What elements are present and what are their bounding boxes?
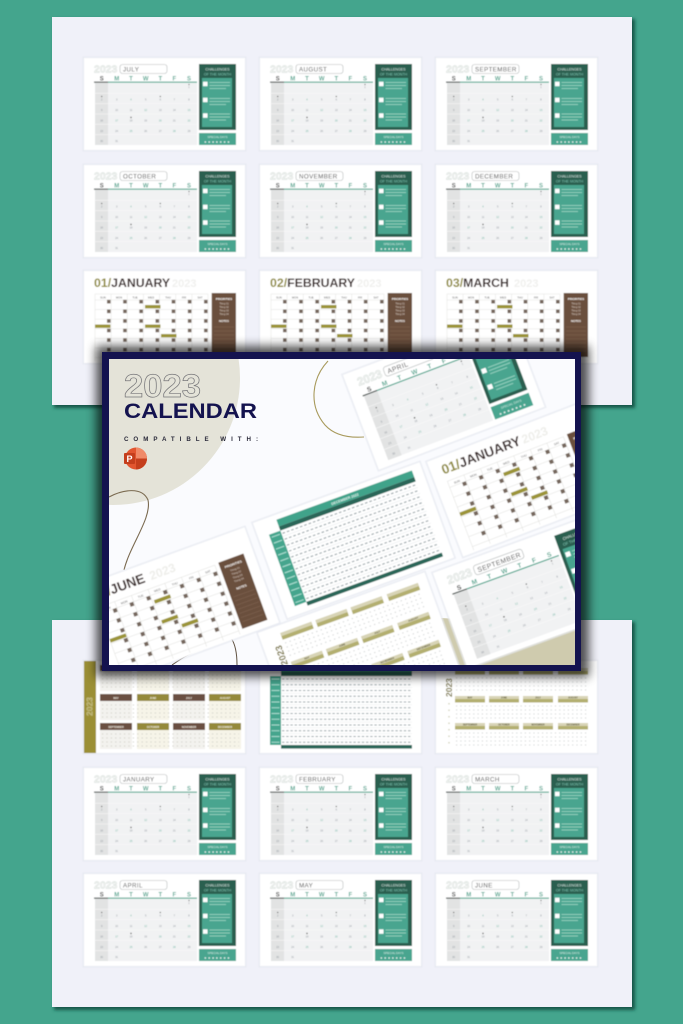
slide: October — [82, 164, 246, 258]
title: CALENDAR: CALENDAR — [124, 399, 258, 423]
rotated slide: April — [342, 359, 546, 472]
slide: year table — [258, 660, 422, 754]
slide: September — [434, 56, 598, 152]
slide: October: OCTOBER — [123, 174, 156, 180]
slide: April — [82, 872, 246, 968]
rotated slide: 01 January priorities: 01/JANUARY — [439, 433, 523, 477]
rotated slide: September — [432, 520, 575, 665]
rotated slide: 01 January priorities: 2023 — [520, 424, 550, 447]
slide: year overview brown and olive — [82, 660, 246, 754]
slide: January — [82, 766, 246, 862]
hero shadow — [96, 346, 589, 677]
slide: August — [258, 56, 422, 152]
slide: January: JANUARY — [123, 776, 155, 784]
rotated slide: 06 June priorities: 2023 — [147, 560, 178, 583]
slide: May: MAY — [299, 882, 313, 890]
slide: February: FEBRUARY — [299, 776, 336, 784]
slide: June: JUNE — [475, 882, 493, 890]
slide: year overview khaki — [434, 660, 598, 754]
slide: December — [434, 164, 598, 258]
panel: top sheet — [52, 17, 635, 408]
slide: September: SEPTEMBER — [475, 66, 517, 74]
slide: 02 February priorities: 2023 — [357, 278, 381, 290]
subtitle: compatible with: COMPATIBLE WITH: — [124, 436, 258, 443]
gold curve top — [314, 361, 364, 437]
rotated slide: 06 June priorities: 06/JUNE — [90, 571, 147, 604]
slide: 01 January priorities: 01/JANUARY — [94, 276, 170, 290]
hero frame — [102, 352, 581, 671]
slide: 03 March priorities — [434, 270, 598, 364]
rotated slide: April: APRIL — [387, 361, 410, 376]
slide: 01 January priorities: 2023 — [172, 278, 196, 290]
top slide grid — [82, 56, 598, 364]
slide: March — [434, 766, 598, 862]
slide: 03 March priorities: 2023 — [514, 278, 538, 290]
hero slide — [109, 359, 575, 665]
title: 2023 outline: 2023 — [124, 368, 201, 404]
slide: November — [258, 164, 422, 258]
bottom slide grid — [82, 660, 598, 968]
slide: April: APRIL — [123, 882, 143, 890]
slide: 01 January priorities — [82, 270, 246, 364]
slide: December: DECEMBER — [475, 174, 513, 180]
brown curve bottom — [172, 638, 237, 665]
icon: PowerPoint: P — [126, 454, 133, 464]
slide: February — [258, 766, 422, 862]
rotated slide: year overview — [256, 571, 460, 665]
slide: 03 March priorities: 03/MARCH — [446, 276, 509, 290]
slide: August: AUGUST — [299, 66, 327, 74]
rotated slide: 01 January priorities — [426, 404, 575, 558]
icon: PowerPoint — [124, 448, 147, 470]
slide: 02 February priorities — [258, 270, 422, 364]
slide: July: JULY — [123, 66, 139, 74]
slide: November: NOVEMBER — [299, 174, 338, 180]
rotated slide: 06 June priorities — [109, 526, 280, 665]
rotated slide: September: SEPTEMBER — [477, 552, 522, 574]
slide: June — [434, 872, 598, 968]
slide: 02 February priorities: 02/FEBRUARY — [270, 276, 355, 290]
slide: March: MARCH — [475, 776, 500, 784]
beige circle — [109, 359, 240, 505]
panel: bottom sheet — [52, 620, 635, 1010]
brown curve left — [109, 491, 148, 570]
beige corner shape — [441, 618, 578, 668]
rotated slide: year table — [251, 460, 456, 620]
slide: May — [258, 872, 422, 968]
slide: July — [82, 56, 246, 152]
